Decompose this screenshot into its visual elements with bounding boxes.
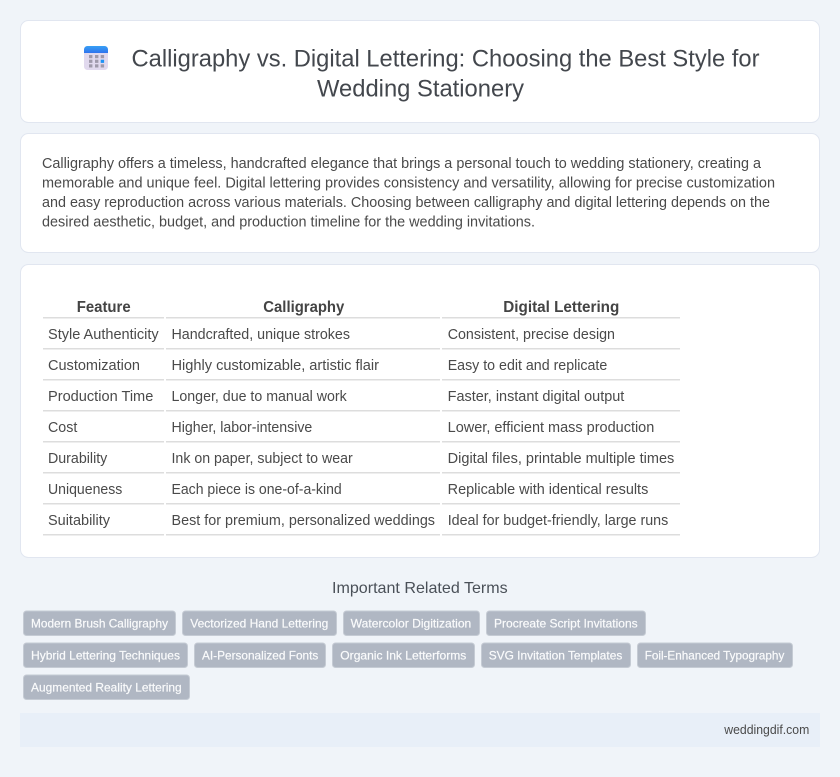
panel: comparison table bbox=[20, 264, 820, 558]
row: suitability bbox=[48, 513, 668, 529]
tag: modern brush calligraphy: Modern Brush Calligraphy bbox=[31, 616, 168, 630]
table header bbox=[77, 299, 619, 316]
text block: introduction paragraph: Calligraphy offers a timeless, handcrafted elegance that brings a personal touch to wedding stationery, creating a bbox=[42, 156, 761, 172]
panel: introduction bbox=[20, 134, 820, 252]
title bbox=[132, 46, 760, 102]
row: style authenticity: Handcrafted, unique strokes bbox=[172, 327, 350, 343]
heading: important related terms: Important Related Terms bbox=[332, 580, 508, 597]
row: durability: Ink on paper, subject to wear bbox=[172, 451, 353, 467]
tag: vectorized hand lettering: Vectorized Hand Lettering bbox=[190, 616, 328, 630]
row: customization: Customization bbox=[48, 358, 140, 374]
row: style authenticity: Style Authenticity bbox=[48, 327, 160, 343]
tag: svg invitation templates: SVG Invitation Templates bbox=[489, 648, 622, 662]
tag: watercolor digitization bbox=[344, 611, 480, 636]
row: cost bbox=[48, 420, 654, 436]
title: Wedding Stationery bbox=[317, 76, 524, 102]
title: Calligraphy vs. Digital Lettering: Choosing the Best Style for bbox=[132, 46, 760, 72]
text block: introduction paragraph: and easy reproduction across various materials. Choosing between calligraphy and digital lettering depends on the bbox=[42, 195, 770, 211]
tag: hybrid lettering techniques bbox=[24, 643, 188, 668]
tag: foil-enhanced typography bbox=[638, 643, 792, 668]
related term tags bbox=[24, 611, 792, 700]
tag: hybrid lettering techniques: Hybrid Lettering Techniques bbox=[31, 648, 180, 662]
text block: introduction paragraph bbox=[42, 156, 775, 230]
row: customization: Easy to edit and replicate bbox=[448, 358, 607, 374]
row: style authenticity: Consistent, precise design bbox=[448, 327, 615, 343]
row: production time: Production Time bbox=[48, 389, 153, 405]
tag: augmented reality lettering bbox=[24, 675, 190, 700]
row: cost: Higher, labor-intensive bbox=[172, 420, 312, 436]
row: durability: Digital files, printable multiple times bbox=[448, 451, 674, 467]
row: durability bbox=[48, 451, 674, 467]
row: uniqueness: Uniqueness bbox=[48, 482, 122, 498]
row: uniqueness: Each piece is one-of-a-kind bbox=[172, 482, 342, 498]
tag: ai-personalized fonts: AI-Personalized Fonts bbox=[202, 648, 318, 662]
row: cost: Cost bbox=[48, 420, 77, 436]
panel: header bbox=[20, 20, 820, 122]
text block: introduction paragraph: desired aesthetic, budget, and production timeline for the wedding invitations. bbox=[42, 214, 535, 230]
icon: calendar bbox=[84, 46, 108, 70]
footer: weddingdif.com bbox=[723, 722, 809, 737]
tag: svg invitation templates bbox=[482, 643, 630, 668]
tag: vectorized hand lettering bbox=[182, 611, 336, 636]
tag: ai-personalized fonts bbox=[194, 643, 326, 668]
tag: procreate script invitations bbox=[486, 611, 646, 636]
row: customization bbox=[48, 358, 607, 374]
table header: Digital Lettering bbox=[503, 299, 619, 316]
row: suitability: Ideal for budget-friendly, large runs bbox=[448, 513, 668, 529]
tag: organic ink letterforms: Organic Ink Letterforms bbox=[340, 648, 466, 662]
footer bbox=[20, 713, 820, 747]
row: production time bbox=[48, 389, 624, 405]
row: suitability: Suitability bbox=[48, 513, 111, 529]
row: customization: Highly customizable, artistic flair bbox=[172, 358, 379, 374]
tag: watercolor digitization: Watercolor Digitization bbox=[351, 616, 471, 630]
row: uniqueness: Replicable with identical results bbox=[448, 482, 648, 498]
tag: organic ink letterforms bbox=[332, 643, 474, 668]
table header: Calligraphy bbox=[263, 299, 344, 316]
row: durability: Durability bbox=[48, 451, 108, 467]
table header: Feature bbox=[77, 299, 131, 316]
row: cost: Lower, efficient mass production bbox=[448, 420, 654, 436]
tag: procreate script invitations: Procreate Script Invitations bbox=[494, 616, 638, 630]
row: style authenticity bbox=[48, 327, 615, 343]
row: production time: Longer, due to manual work bbox=[172, 389, 347, 405]
row: suitability: Best for premium, personalized weddings bbox=[172, 513, 435, 529]
text block: introduction paragraph: memorable and unique feel. Digital lettering provides consistency and versatility, allowing for precise customization bbox=[42, 176, 775, 192]
tag: modern brush calligraphy bbox=[24, 611, 176, 636]
row: uniqueness bbox=[48, 482, 648, 498]
tag: foil-enhanced typography: Foil-Enhanced Typography bbox=[645, 648, 784, 662]
row: production time: Faster, instant digital output bbox=[448, 389, 624, 405]
tag: augmented reality lettering: Augmented Reality Lettering bbox=[31, 680, 182, 694]
